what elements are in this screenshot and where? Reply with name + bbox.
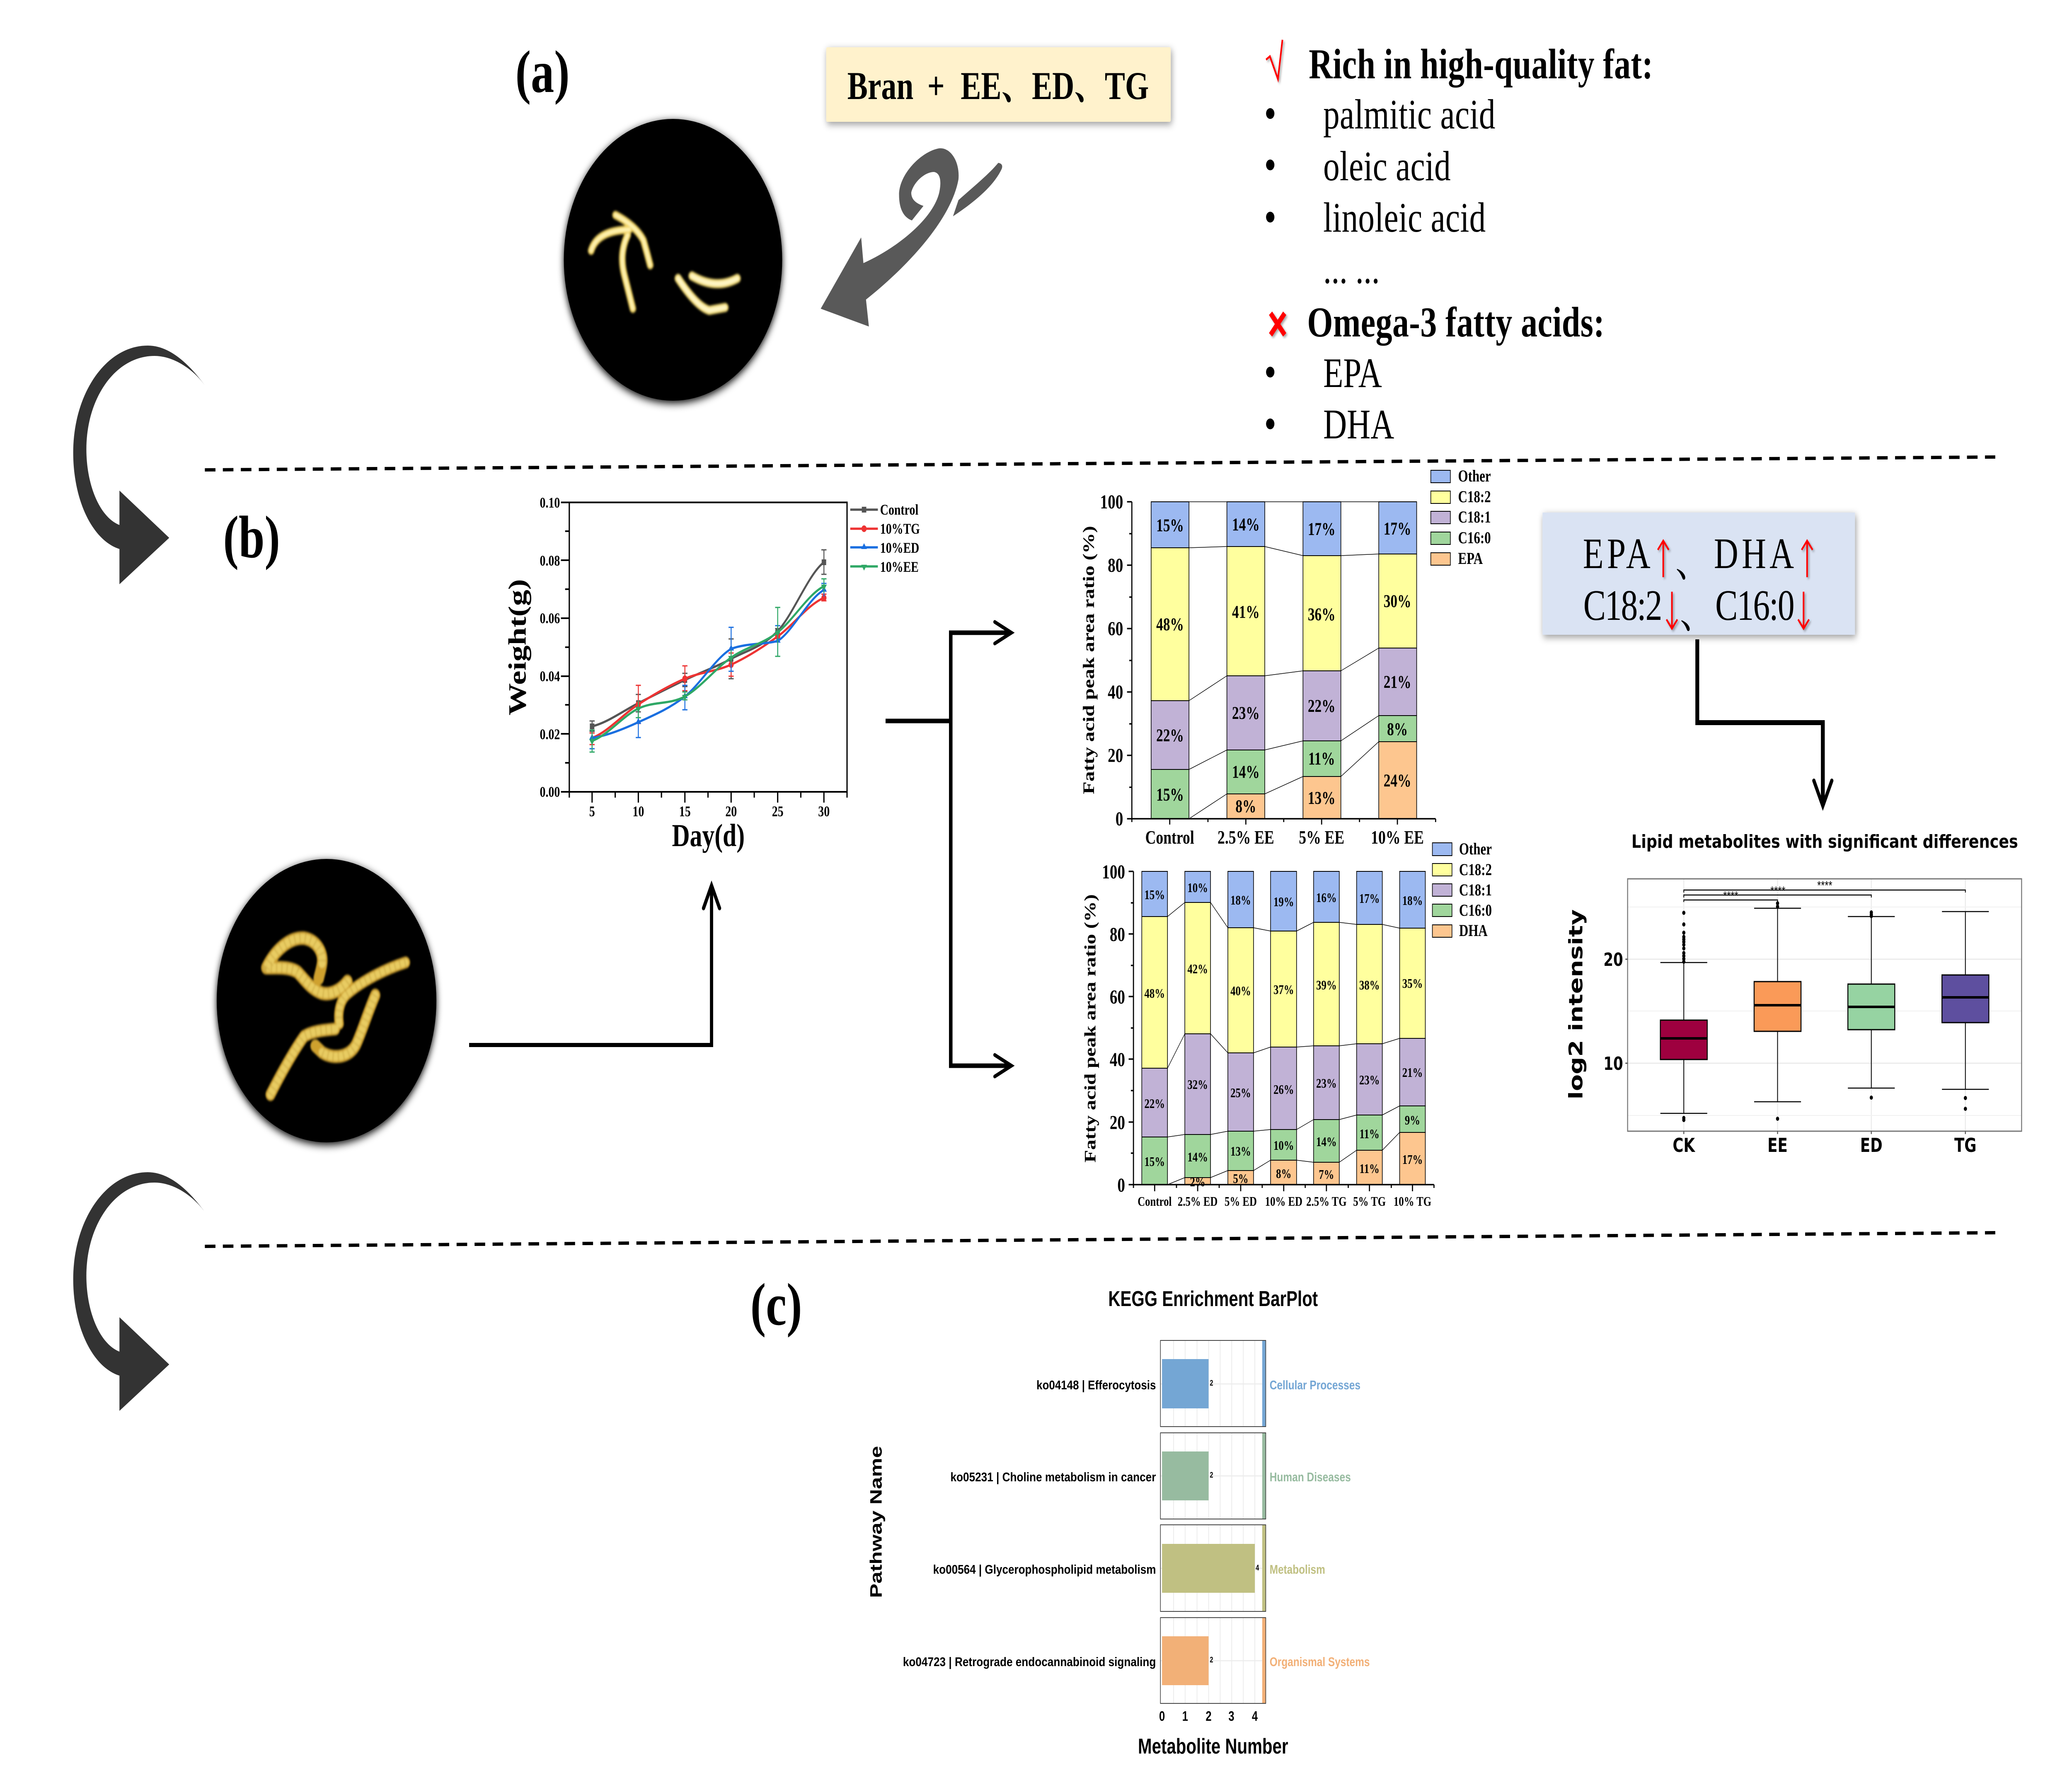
series: 10% ED: [589, 583, 827, 749]
bar value labels: 48%: [1145, 986, 1165, 1001]
bar value labels: 8%: [1387, 720, 1408, 739]
bar value labels: 22%: [1308, 697, 1336, 716]
legend: C18:1: [1459, 880, 1492, 899]
row: Glycerophospholipid metabolism: [933, 1525, 1325, 1611]
x labels: 10% TG: [1394, 1194, 1431, 1209]
series: 10% TG: [590, 594, 826, 745]
box: EE: [1754, 908, 1801, 1102]
bullet list: fats: oleic acid: [1323, 143, 1451, 189]
y title: log2 intensity: [1565, 910, 1587, 1099]
x tick labels: 1: [1182, 1709, 1188, 1724]
bullet list: omega-3: DHA: [1323, 401, 1394, 448]
row: Retrograde endocannabinoid signaling: [903, 1618, 1370, 1703]
bar value labels: 42%: [1187, 962, 1208, 977]
icon: red cross: [1271, 313, 1285, 335]
bar value labels: 14%: [1187, 1150, 1208, 1165]
x title: Metabolite Number: [1138, 1734, 1288, 1758]
x tick labels: CK: [1673, 1134, 1696, 1156]
bar value labels: 2%: [1190, 1175, 1205, 1190]
bar value labels: 7%: [1319, 1167, 1334, 1182]
x axis labels: 25: [772, 803, 784, 820]
heading: omega-3: Omega-3 fatty acids:: [1307, 298, 1605, 346]
row: Efferocytosis: [1036, 1340, 1360, 1427]
x tick labels: 3: [1228, 1709, 1234, 1724]
bar value labels: 15%: [1156, 785, 1184, 805]
text block: fat composition list: [1266, 40, 1653, 448]
legend: C18:2: [1458, 487, 1491, 506]
y title: Pathway Name: [867, 1446, 885, 1598]
x tick labels: 0: [1159, 1709, 1165, 1724]
y labels: 0: [1116, 808, 1123, 830]
bullet list: fats: linoleic acid: [1323, 194, 1486, 241]
bar value labels: 8%: [1235, 797, 1256, 816]
bar value labels: 48%: [1156, 615, 1184, 634]
bar value labels: 5%: [1233, 1171, 1249, 1186]
x labels: Control: [1145, 827, 1194, 848]
legend: Other: [1458, 467, 1491, 485]
bar value labels: 14%: [1232, 515, 1260, 535]
row: Choline metabolism: [951, 1433, 1351, 1519]
bar value labels: 21%: [1402, 1065, 1423, 1080]
bars: [1151, 502, 1417, 819]
y title: Fatty acid peak area ratio (%): [1080, 526, 1098, 794]
bar value labels: 17%: [1384, 519, 1411, 539]
arrow: grey swirl from diet to larvae: [821, 148, 1002, 327]
x labels: 5% ED: [1225, 1194, 1257, 1209]
bar value labels: 22%: [1156, 726, 1184, 745]
row: Efferocytosis: Cellular Processes: [1270, 1378, 1360, 1392]
x tick labels: 2: [1205, 1709, 1212, 1724]
y tick labels: 10: [1603, 1053, 1623, 1074]
row: Choline metabolism: 2: [1210, 1471, 1213, 1479]
row: Glycerophospholipid metabolism: ko00564 | Glycerophospholipid metabolism: [933, 1562, 1156, 1577]
arrow: changes to box plot: [1697, 639, 1832, 806]
bar value labels: 21%: [1384, 672, 1411, 692]
bar value labels: 30%: [1384, 592, 1411, 611]
x tick labels: [1673, 1134, 1977, 1156]
chart title: KEGG Enrichment BarPlot: [1108, 1287, 1318, 1311]
y labels: 80: [1108, 555, 1123, 576]
bar value labels: 15%: [1156, 516, 1184, 535]
bar value labels: 10%: [1187, 880, 1208, 895]
bullet list: omega-3: [1266, 349, 1394, 448]
row: Glycerophospholipid metabolism: 4: [1256, 1563, 1259, 1572]
axes: [1127, 502, 1435, 825]
legend: C18:1: [1458, 508, 1491, 526]
bar value labels: 8%: [1276, 1166, 1291, 1181]
callout: fatty acid changes: C18:2: [1583, 581, 1662, 629]
axes: [1129, 871, 1434, 1191]
x tick labels: EE: [1767, 1134, 1788, 1156]
heading: section a label: (a): [516, 39, 570, 105]
heading: rich in fat: Rich in high-quality fat:: [1309, 40, 1653, 87]
y labels: 0: [1117, 1175, 1125, 1196]
bar value labels: 17%: [1308, 520, 1336, 539]
axis title: day: Day(d): [672, 818, 745, 853]
bar value labels: 26%: [1273, 1082, 1294, 1097]
bar value labels: 17%: [1359, 891, 1380, 906]
bar value labels: 25%: [1230, 1086, 1251, 1101]
y labels: 80: [1110, 924, 1125, 946]
bar chart: KEGG enrichment: [867, 1287, 1370, 1758]
bar value labels: 18%: [1402, 893, 1423, 908]
heading: section c label: (c): [750, 1271, 802, 1338]
bar value labels: 23%: [1232, 704, 1260, 723]
bullet list: fats: ... ...: [1323, 245, 1380, 292]
callout: fatty acid changes: C16:0: [1715, 581, 1795, 629]
callout: bran diet box: Bran: [847, 64, 913, 108]
significance brackets: ****: [1770, 884, 1786, 898]
x labels: 10% ED: [1265, 1194, 1302, 1209]
callout: fatty acid changes: EPA: [1583, 530, 1651, 578]
legend: [1433, 839, 1492, 940]
y labels: 60: [1110, 987, 1125, 1008]
line chart: weight over days: [504, 494, 920, 853]
x tick labels: 4: [1252, 1709, 1258, 1724]
x labels: [1145, 827, 1424, 848]
bar value labels: 24%: [1384, 771, 1411, 791]
y labels: 40: [1110, 1049, 1125, 1071]
legend: Control: [880, 501, 918, 518]
y labels: 100: [1102, 861, 1125, 883]
legend: [1431, 467, 1491, 568]
x labels: Control: [1138, 1194, 1172, 1209]
legend: C16:0: [1458, 528, 1491, 547]
significance brackets: [1684, 878, 1965, 903]
series: 10% EE: [589, 579, 827, 752]
bar value labels: 14%: [1232, 762, 1260, 782]
row: Retrograde endocannabinoid signaling: Organismal Systems: [1270, 1655, 1370, 1669]
series: control: [590, 550, 826, 731]
bar value labels: 13%: [1230, 1144, 1251, 1159]
bar value labels: 37%: [1273, 982, 1294, 997]
bar value labels: 16%: [1316, 890, 1337, 905]
callout: bran diet box: [826, 47, 1171, 122]
y labels: [1102, 861, 1125, 1196]
row: Retrograde endocannabinoid signaling: 2: [1210, 1655, 1213, 1664]
y labels: 20: [1108, 745, 1123, 767]
bar value labels: 39%: [1316, 978, 1337, 993]
outliers: [1682, 901, 1967, 1122]
bar value labels: 22%: [1145, 1096, 1165, 1111]
panel grid: [1160, 1341, 1262, 1703]
bar value labels: 11%: [1360, 1127, 1380, 1142]
arrow: larvae to growth chart: [469, 885, 719, 1045]
y tick labels: 20: [1603, 949, 1623, 970]
y labels: 60: [1108, 618, 1123, 640]
bar value labels: 35%: [1402, 976, 1423, 991]
arrow: curved arrow b to c: [73, 1172, 205, 1411]
legend: C18:2: [1459, 860, 1492, 879]
heading: section b label: (b): [223, 504, 280, 571]
stacked bar chart: DHA: [1081, 839, 1492, 1209]
y title: Fatty acid peak area ratio (%): [1081, 894, 1099, 1163]
x axis labels: 5: [589, 803, 595, 820]
icon: larvae on black circle (section a): [564, 119, 782, 401]
y axis labels: [540, 494, 560, 800]
bullet list: omega-3: EPA: [1323, 349, 1382, 396]
row: Choline metabolism: Human Diseases: [1270, 1470, 1351, 1484]
y axis labels: 0.06: [540, 610, 560, 626]
bar value labels: 9%: [1405, 1113, 1420, 1128]
legend: 10%EE: [880, 559, 919, 575]
y axis labels: 0.02: [540, 726, 560, 743]
row: Retrograde endocannabinoid signaling: ko04723 | Retrograde endocannabinoid signaling: [903, 1655, 1156, 1669]
box: CK: [1661, 963, 1707, 1113]
callout: fatty acid changes: 、: [1675, 538, 1709, 586]
legend: 10%ED: [880, 539, 919, 556]
bar value labels: 18%: [1230, 893, 1251, 908]
bullet list: fats: [1266, 91, 1495, 292]
bar value labels: 36%: [1308, 605, 1336, 624]
bar value labels: 38%: [1359, 978, 1380, 993]
arrow: curved arrow a to b: [73, 346, 205, 584]
x axis labels: 30: [818, 803, 830, 820]
bullet list: fats: palmitic acid: [1323, 91, 1495, 138]
box plot: log2 intensity: [1565, 878, 2021, 1156]
x tick labels: ED: [1860, 1134, 1883, 1156]
x labels: 2.5% ED: [1178, 1194, 1218, 1209]
bar value labels: 11%: [1360, 1161, 1380, 1176]
y labels: 100: [1100, 491, 1123, 513]
row: Glycerophospholipid metabolism: Metabolism: [1270, 1562, 1325, 1577]
significance brackets: ****: [1723, 889, 1738, 903]
heading: box plot title: Lipid metabolites with significant differences: [1631, 831, 2018, 852]
bar value labels: 40%: [1230, 984, 1251, 999]
legend: DHA: [1459, 921, 1488, 940]
bar value labels: 17%: [1402, 1152, 1423, 1167]
callout: fatty acid changes: [1542, 513, 1855, 637]
x labels: [1138, 1194, 1431, 1209]
y labels: 20: [1110, 1112, 1125, 1134]
legend: [850, 501, 920, 575]
stacked bar chart: EPA: [1080, 467, 1491, 848]
bars: [1142, 871, 1425, 1185]
legend: C16:0: [1459, 901, 1492, 919]
x labels: 5% EE: [1299, 827, 1344, 848]
bar value labels: [1156, 515, 1411, 816]
bar value labels: 19%: [1273, 895, 1294, 910]
x labels: 5% TG: [1353, 1194, 1386, 1209]
x axis labels: 15: [679, 803, 691, 820]
y axis ticks: [561, 502, 847, 803]
icon: larvae on black circle (section b): [217, 859, 436, 1142]
row: Choline metabolism: ko05231 | Choline metabolism in cancer: [951, 1470, 1156, 1484]
legend: 10%TG: [880, 520, 920, 537]
significance brackets: ****: [1817, 878, 1832, 893]
bar value labels: 23%: [1359, 1073, 1380, 1088]
callout: fatty acid changes: DHA: [1714, 530, 1794, 578]
y axis labels: 0.10: [540, 494, 560, 511]
arrow: chart branching to two bar charts: [886, 622, 1012, 1076]
x labels: 10% EE: [1371, 827, 1424, 848]
bar value labels: 15%: [1145, 1154, 1165, 1169]
y labels: 40: [1108, 682, 1123, 703]
y tick labels: [1603, 949, 1623, 1074]
row: Efferocytosis: ko04148 | Efferocytosis: [1036, 1378, 1156, 1392]
x labels: 2.5% TG: [1306, 1194, 1346, 1209]
x tick labels: [1159, 1709, 1258, 1724]
bar value labels: [1145, 880, 1423, 1190]
axis title: weight: Weight(g): [504, 579, 531, 716]
x labels: 2.5% EE: [1218, 827, 1274, 848]
box: TG: [1942, 912, 1989, 1089]
x axis labels: 10: [632, 803, 644, 820]
bar value labels: 23%: [1316, 1076, 1337, 1091]
legend: Other: [1459, 839, 1492, 858]
x axis labels: [589, 803, 830, 820]
bar value labels: 15%: [1145, 888, 1165, 902]
y labels: [1100, 491, 1123, 830]
bar value labels: 41%: [1232, 602, 1260, 622]
icon: red check mark: [1266, 40, 1283, 79]
bar value labels: 32%: [1187, 1077, 1208, 1092]
bar value labels: 13%: [1308, 789, 1336, 808]
box: ED: [1848, 917, 1895, 1088]
callout: bran diet box: EE、ED、TG: [961, 64, 1149, 108]
y axis labels: 0.08: [540, 552, 560, 569]
row: Efferocytosis: 2: [1210, 1379, 1213, 1387]
bar value labels: 10%: [1273, 1138, 1294, 1153]
x axis labels: 20: [725, 803, 737, 820]
callout: bran diet box: +: [927, 64, 945, 108]
callout: fatty acid changes: 、: [1680, 589, 1714, 637]
x tick labels: TG: [1954, 1134, 1977, 1156]
icons: red up and down arrows: [1658, 541, 1813, 629]
legend: EPA: [1458, 549, 1483, 568]
y axis labels: 0.04: [540, 668, 560, 685]
bar value labels: 11%: [1308, 749, 1335, 769]
bar value labels: 14%: [1316, 1134, 1337, 1149]
y axis labels: 0.00: [540, 784, 560, 800]
